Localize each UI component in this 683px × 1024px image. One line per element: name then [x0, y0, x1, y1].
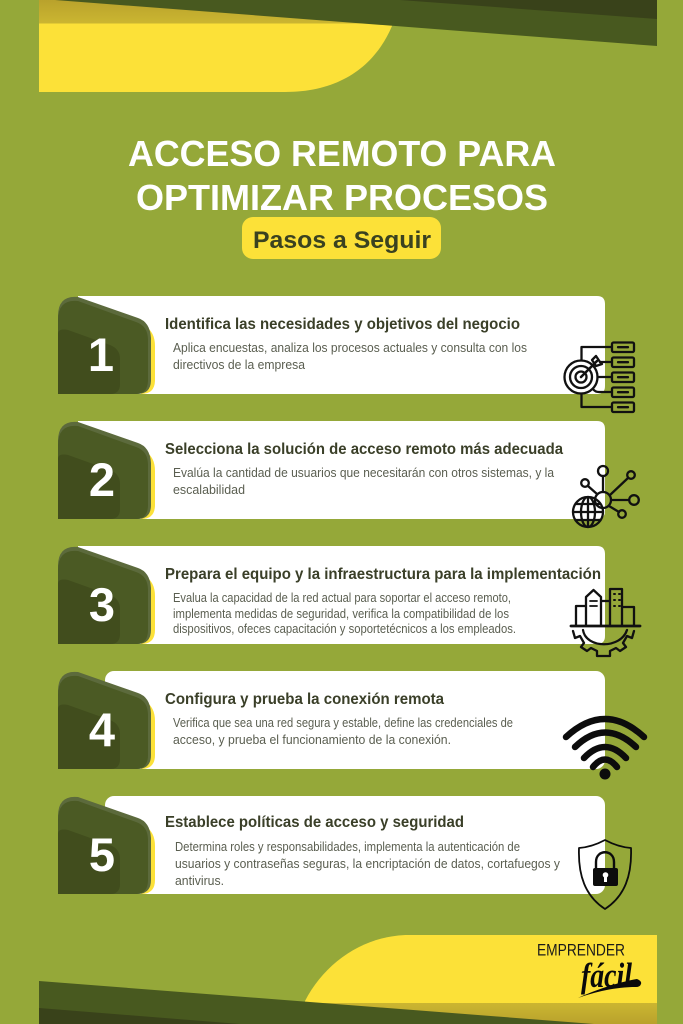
step 4 panel	[58, 671, 644, 780]
logo: Emprender Fácil: fácil	[581, 955, 632, 995]
step 2 panel	[58, 421, 639, 527]
logo: Emprender Fácil: EMPRENDER	[537, 940, 625, 960]
icon: city on gear	[571, 589, 640, 656]
bottom decorative banner	[39, 935, 657, 1024]
step 5 description: usuarios y contraseñas seguras, la encriptación de datos, cortafuegos y	[175, 856, 560, 871]
step 2 description: escalabilidad	[173, 482, 245, 497]
subtitle pill	[242, 217, 441, 259]
step 1 description	[173, 340, 527, 372]
step 4 badge: 4	[89, 703, 115, 756]
step 3 heading: Prepara el equipo y la infraestructura para la implementación	[165, 566, 601, 583]
step 2 badge	[58, 422, 155, 519]
step 3 description	[173, 590, 516, 636]
step 2 heading: Selecciona la solución de acceso remoto más adecuada	[165, 441, 563, 458]
step 3 description: dispositivos, ofeces capacitación y soportetécnicos a los empleados.	[173, 621, 516, 636]
icon: shield with padlock	[579, 840, 631, 909]
step 2 description	[173, 465, 555, 497]
step 3 badge	[58, 547, 155, 644]
step 2 description: Evalúa la cantidad de usuarios que necesitarán con otros sistemas, y la	[173, 465, 555, 480]
step 1 panel	[58, 296, 634, 412]
subtitle pill: Pasos a Seguir	[253, 227, 431, 254]
top decorative banner	[39, 0, 657, 92]
step 5 badge	[58, 797, 155, 894]
icon: target with checklist	[564, 342, 634, 412]
step 1 badge	[58, 297, 155, 394]
step 1 badge: 1	[88, 328, 114, 381]
step 5 heading: Establece políticas de acceso y seguridad	[165, 814, 464, 831]
step 4 badge	[58, 672, 155, 769]
step 4 description: acceso, y prueba el funcionamiento de la conexión.	[173, 732, 451, 747]
logo: Emprender Fácil	[537, 940, 641, 998]
icon: wifi	[566, 719, 644, 780]
step 5 description	[175, 839, 560, 888]
step 4 description: Verifica que sea una red segura y estable, define las credenciales de	[173, 715, 513, 730]
step 3 badge: 3	[89, 578, 115, 631]
step 5 badge: 5	[89, 828, 115, 881]
step 1 heading: Identifica las necesidades y objetivos del negocio	[165, 316, 520, 333]
title	[128, 133, 556, 218]
step 1 description: directivos de la empresa	[173, 357, 306, 372]
icon: globe network	[573, 466, 639, 527]
step 5 panel	[58, 796, 631, 909]
step 4 heading: Configura y prueba la conexión remota	[165, 691, 444, 708]
step 3 description: Evalua la capacidad de la red actual para soportar el acceso remoto,	[173, 590, 511, 605]
step 4 description	[173, 715, 513, 747]
title: OPTIMIZAR PROCESOS	[136, 177, 548, 218]
step 3 panel	[58, 546, 640, 656]
step 3 description: implementa medidas de seguridad, verifica la compatibilidad de los	[173, 606, 509, 621]
step 1 description: Aplica encuestas, analiza los procesos actuales y consulta con los	[173, 340, 527, 355]
step 5 description: antivirus.	[175, 873, 224, 888]
step 2 badge: 2	[89, 453, 115, 506]
step 5 description: Determina roles y responsabilidades, implementa la autenticación de	[175, 839, 520, 854]
title: ACCESO REMOTO PARA	[128, 133, 556, 174]
